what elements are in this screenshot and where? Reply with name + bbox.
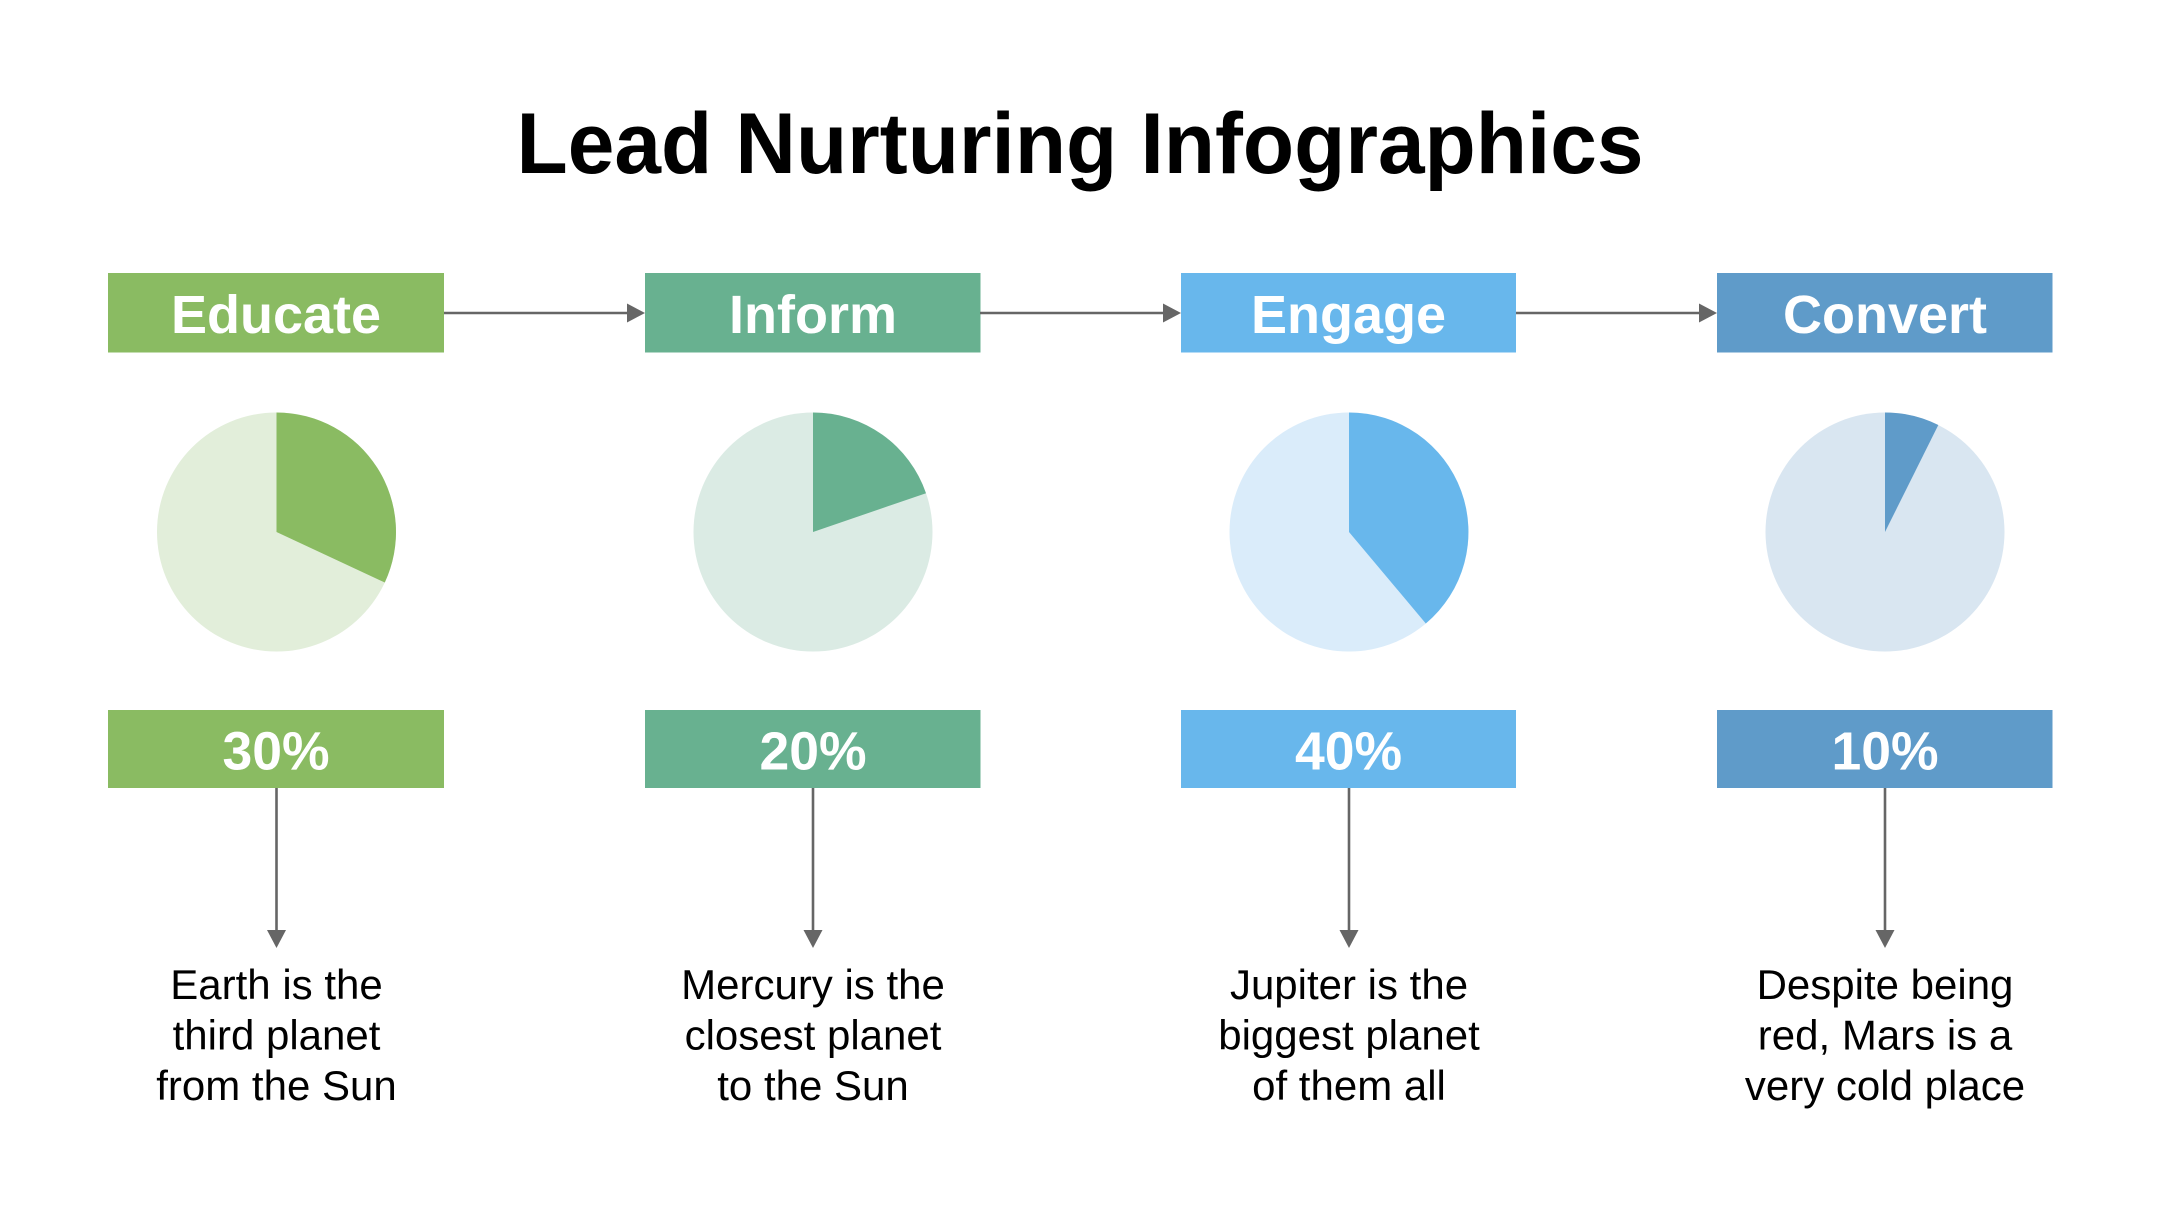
description: convert: red, Mars is a [1758,1012,2013,1058]
heading: convert [1717,273,2052,352]
heading: educate: Educate [171,285,381,345]
heading: inform: Inform [729,285,897,345]
arrow: inform to engage [980,304,1181,322]
panel: engage [1181,273,1516,1109]
heading: engage: Engage [1251,285,1446,345]
description: engage: Jupiter is the [1230,961,1468,1008]
description: engage: biggest planet [1218,1012,1480,1058]
arrow: down to description [1876,788,1894,948]
value: 20% [645,710,980,788]
value: 10% [1717,710,2052,788]
title: Lead Nurturing Infographics [516,96,1644,192]
pie chart: engage 40% [1230,412,1468,652]
arrow: down to description [267,788,286,948]
heading: inform [645,273,980,352]
description: inform: to the Sun [717,1062,909,1109]
description: convert: very cold place [1745,1062,2025,1109]
value: 40%: 40% [1295,722,1402,782]
value: 40% [1181,710,1516,788]
heading: engage [1181,273,1516,352]
description: educate: Earth is the [170,961,383,1008]
pie chart: convert 10% [1766,412,2004,652]
panel: inform [645,273,980,1109]
heading: educate [108,273,444,352]
arrow: engage to convert [1516,304,1717,322]
arrow: educate to inform [444,304,645,322]
value: 30% [108,710,444,788]
value: 20%: 20% [759,722,867,782]
arrow: down to description [1340,788,1358,948]
description: educate: third planet [173,1012,381,1058]
panel: educate [108,273,444,1109]
description: educate: from the Sun [156,1062,397,1109]
description: inform: closest planet [685,1012,942,1058]
description: engage: of them all [1252,1062,1446,1109]
pie chart: inform 20% [694,412,932,652]
value: 10%: 10% [1831,722,1939,782]
pie chart: educate 30% [157,412,396,652]
arrow: down to description [804,788,822,948]
heading: convert: Convert [1783,285,1987,345]
description: convert: Despite being [1757,961,2013,1008]
value: 30%: 30% [222,722,330,782]
description: inform: Mercury is the [681,961,945,1008]
panel: convert [1717,273,2052,1109]
